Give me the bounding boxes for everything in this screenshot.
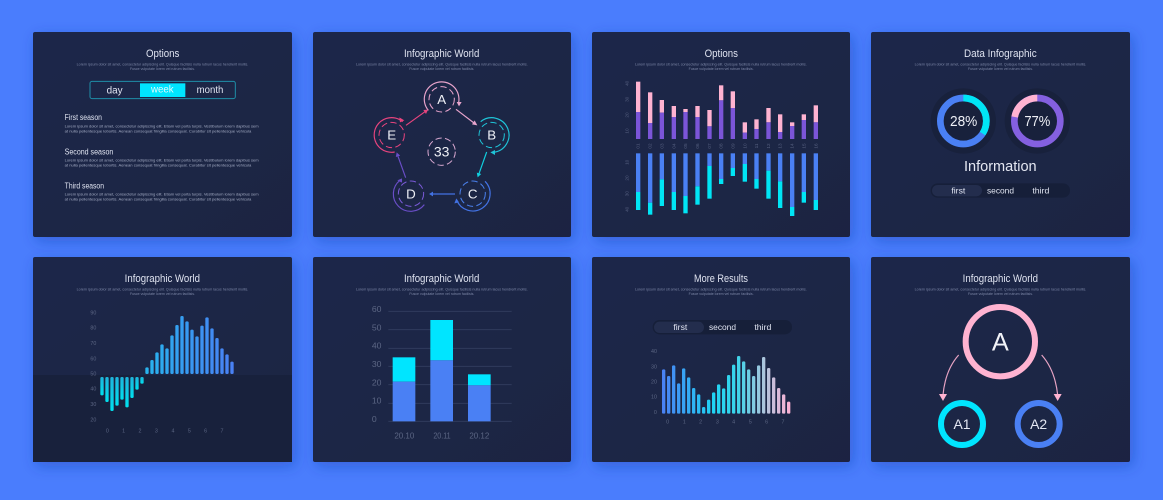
arrow: A to A2	[1042, 355, 1062, 401]
circle A1: A1	[953, 416, 971, 432]
subtitle text	[77, 286, 248, 296]
toggle: day week month	[90, 81, 235, 99]
axis labels: 05	[683, 143, 688, 149]
node E	[374, 117, 404, 152]
tabs: first second third: third	[754, 322, 772, 332]
x axis labels: 0	[106, 429, 109, 435]
arrow: C to D	[429, 192, 455, 196]
text block: third season: Third season	[65, 181, 104, 190]
panel: diverging bar chart	[33, 257, 292, 462]
y axis labels: 30	[90, 402, 96, 408]
text block: second season	[65, 147, 259, 168]
panel: cycle diagram	[313, 32, 571, 237]
heading: infographic world: Infographic World	[963, 273, 1038, 285]
y axis labels: 20	[372, 377, 382, 387]
axis labels: 12	[766, 143, 771, 149]
arrow: E to A	[406, 110, 428, 125]
axis labels: 03	[659, 143, 664, 149]
circle A2	[1018, 403, 1060, 445]
y axis labels: 0	[372, 414, 377, 424]
x axis labels: 6	[204, 429, 207, 435]
x axis labels	[106, 429, 224, 435]
x axis labels: 3	[155, 429, 158, 435]
text block: second season: Second season	[65, 147, 113, 156]
axis labels: 08	[719, 143, 724, 149]
node B	[479, 118, 509, 155]
heading: more results: More Results	[694, 273, 748, 285]
toggle: day week month: day	[107, 85, 123, 96]
x axis labels: 1	[683, 420, 686, 426]
axis labels: 20	[625, 175, 630, 181]
node D	[393, 178, 424, 211]
axis labels: 13	[778, 143, 783, 149]
y axis labels: 40	[651, 349, 657, 355]
subtitle text	[915, 61, 1086, 71]
node B: B	[487, 128, 496, 143]
axis labels: 11	[754, 143, 759, 148]
negative bars	[100, 377, 144, 411]
axis labels: 10	[742, 143, 747, 149]
axis labels: 40	[625, 206, 630, 212]
arrow: B to C	[477, 152, 487, 177]
axis labels: 10	[625, 128, 630, 134]
upper bars: pink segments	[636, 82, 818, 133]
tabs: first second third: third	[1032, 185, 1050, 195]
x axis labels: 2	[699, 420, 702, 426]
column 20.11	[430, 320, 453, 421]
x axis labels: 7	[221, 429, 224, 435]
y axis labels: 40	[90, 387, 96, 393]
text block: second season: at nulla pellentesque lobortis. Aenean consequat fringilla consequat. Curabitur sit pellentesque vehicula	[65, 163, 252, 168]
y axis labels	[90, 310, 96, 423]
subtitle text: Fusce vulputate lorem vel rutrum facilisis.	[409, 66, 474, 71]
subtitle text	[915, 286, 1086, 296]
subtitle text	[356, 286, 528, 296]
y axis labels: 90	[90, 310, 96, 316]
axis labels: 07	[707, 143, 712, 149]
subtitle text	[77, 61, 248, 71]
panel content: donuts	[915, 48, 1086, 198]
subtitle text: Fusce vulputate lorem vel rutrum facilisis.	[130, 291, 195, 296]
subtitle text: Fusce vulputate lorem vel rutrum facilisis.	[968, 66, 1033, 71]
x axis labels: 0	[666, 420, 669, 426]
panel content: more results	[635, 273, 807, 426]
y axis labels: 0	[654, 410, 657, 416]
darker lower band	[33, 375, 292, 462]
y axis labels: 80	[90, 326, 96, 332]
node C: C	[468, 186, 478, 201]
subtitle text: Lorem ipsum dolor sit amet, consectetur adipiscing elit. Quisque facilisis nulla rutrum lacus hendrerit mollis.	[915, 286, 1086, 291]
heading: infographic world: Infographic World	[404, 273, 479, 285]
x axis labels: 4	[732, 420, 735, 426]
donut: 77 percent	[1005, 88, 1070, 154]
axis labels: 30	[625, 96, 630, 102]
subtitle text	[635, 61, 807, 71]
y axis labels: 30	[651, 364, 657, 370]
subtitle text: Lorem ipsum dolor sit amet, consectetur adipiscing elit. Quisque facilisis nulla rutrum lacus hendrerit mollis.	[356, 286, 528, 291]
center value 33: 33	[434, 144, 450, 160]
y axis labels	[651, 349, 657, 416]
text block: first season: Lorem ipsum dolor sit amet, consectetur adipiscing elit. Etiam vel porta turpis. Vestibulum lorem dapibus sem	[65, 123, 259, 128]
text block: third season	[65, 181, 259, 202]
x axis labels	[666, 420, 785, 426]
subtitle text: Fusce vulputate lorem vel rutrum facilisis.	[130, 66, 195, 71]
panel: options season list	[33, 32, 292, 237]
circle A	[966, 307, 1035, 376]
x axis labels: 1	[122, 429, 125, 435]
subtitle text: Lorem ipsum dolor sit amet, consectetur adipiscing elit. Quisque facilisis nulla rutrum lacus hendrerit mollis.	[915, 61, 1086, 66]
axis labels: 02	[648, 143, 653, 149]
heading: infographic world: Infographic World	[404, 48, 479, 60]
panel content: hierarchy	[915, 273, 1086, 445]
panel: donut charts	[871, 32, 1130, 237]
circle A1	[941, 403, 983, 445]
text block: first season	[65, 113, 259, 133]
node D: D	[406, 186, 416, 201]
text block: third season: at nulla pellentesque lobortis. Aenean consequat fringilla consequat. Curabitur sit pellentesque vehicula	[65, 197, 252, 202]
heading: options: Options	[705, 48, 738, 60]
axis labels: 20	[625, 112, 630, 118]
tabs: first second third: first	[951, 185, 966, 195]
y axis labels: 10	[372, 396, 382, 406]
donut: 28 percent: 28%	[950, 114, 977, 130]
gradient bars	[662, 356, 790, 414]
axis labels	[625, 80, 818, 212]
subtitle text: Fusce vulputate lorem vel rutrum facilisis.	[968, 291, 1033, 296]
axis labels: 10	[625, 159, 630, 165]
tabs: first second third	[653, 320, 792, 334]
node A: A	[437, 92, 446, 107]
panel: mirrored stacked bars	[592, 32, 850, 237]
arrow: A to B	[456, 109, 477, 125]
column 20.12	[468, 374, 491, 421]
text block: first season: at nulla pellentesque lobortis. Aenean consequat fringilla consequat. Curabitur sit pellentesque vehicula	[65, 128, 252, 133]
lower bars: cyan segments	[636, 164, 818, 216]
panel content: diverging bars	[77, 273, 248, 435]
x axis labels: 5	[749, 420, 752, 426]
x axis labels: 20.10	[394, 430, 414, 440]
heading: options: Options	[146, 48, 179, 60]
y axis labels: 60	[372, 304, 382, 314]
tabs: first second third	[931, 183, 1070, 198]
node C	[454, 181, 490, 211]
axis labels: 06	[695, 143, 700, 149]
panel: more results	[592, 257, 850, 462]
toggle: day week month: week	[150, 85, 174, 96]
x axis labels	[394, 430, 489, 440]
subtitle text: Lorem ipsum dolor sit amet, consectetur adipiscing elit. Quisque facilisis nulla rutrum lacus hendrerit mollis.	[77, 286, 248, 291]
subtitle text: Lorem ipsum dolor sit amet, consectetur adipiscing elit. Quisque facilisis nulla rutrum lacus hendrerit mollis.	[635, 286, 807, 291]
axis labels: 40	[625, 80, 630, 86]
tabs: first second third: second	[709, 322, 736, 332]
subtitle text: Fusce vulputate lorem vel rutrum facilisis.	[689, 291, 754, 296]
y axis labels: 20	[90, 417, 96, 423]
toggle: day week month: month	[197, 85, 223, 96]
subtitle text: Lorem ipsum dolor sit amet, consectetur adipiscing elit. Quisque facilisis nulla rutrum lacus hendrerit mollis.	[356, 61, 528, 66]
panel: hierarchy circles	[871, 257, 1130, 462]
panel content: stacked columns	[356, 273, 528, 440]
axis labels: 30	[625, 191, 630, 196]
node E: E	[387, 128, 396, 143]
x axis labels: 4	[172, 429, 175, 435]
y axis labels: 50	[90, 371, 96, 377]
axis labels: 04	[671, 143, 676, 149]
y axis labels	[372, 304, 382, 424]
y axis labels: 20	[651, 380, 657, 386]
y axis labels: 60	[90, 356, 96, 362]
x axis labels: 6	[765, 420, 768, 426]
subtitle text: Fusce vulputate lorem vel rutrum facilisis.	[409, 291, 474, 296]
donut: 28 percent	[931, 88, 996, 154]
heading: information: Information	[964, 159, 1037, 175]
arrow: A to A1	[939, 355, 959, 401]
x axis labels: 7	[782, 420, 785, 426]
donut: 77 percent: 77%	[1024, 114, 1050, 130]
tabs: first second third: first	[673, 322, 688, 332]
subtitle text: Lorem ipsum dolor sit amet, consectetur adipiscing elit. Quisque facilisis nulla rutrum lacus hendrerit mollis.	[635, 61, 807, 66]
axis labels: 14	[790, 143, 795, 149]
subtitle text: Lorem ipsum dolor sit amet, consectetur adipiscing elit. Quisque facilisis nulla rutrum lacus hendrerit mollis.	[77, 61, 248, 66]
panel: stacked column chart	[313, 257, 571, 462]
positive bars	[145, 316, 234, 374]
circle A2: A2	[1030, 416, 1047, 432]
text block: first season: First season	[65, 113, 102, 122]
y axis labels: 30	[372, 359, 382, 369]
axis labels: 01	[636, 143, 641, 149]
heading: data infographic: Data Infographic	[964, 48, 1037, 60]
lower bars: blue segments	[636, 153, 818, 207]
panel content: cycle	[356, 48, 528, 211]
x axis labels: 20.12	[469, 430, 489, 440]
upper bars: purple segments	[636, 100, 818, 139]
text block: third season: Lorem ipsum dolor sit amet, consectetur adipiscing elit. Etiam vel porta turpis. Vestibulum lorem dapibus sem	[65, 192, 259, 197]
axis labels: 09	[730, 143, 735, 149]
y axis labels: 10	[651, 395, 657, 401]
column 20.10	[393, 357, 415, 421]
tabs: first second third: second	[987, 185, 1014, 195]
text block: second season: Lorem ipsum dolor sit amet, consectetur adipiscing elit. Etiam vel porta turpis. Vestibulum lorem dapibus sem	[65, 158, 259, 163]
center value 33	[428, 138, 455, 165]
subtitle text	[356, 61, 528, 71]
y axis labels: 70	[90, 341, 96, 347]
panel content: options	[65, 48, 259, 202]
heading: infographic world: Infographic World	[125, 273, 200, 285]
x axis labels: 3	[716, 420, 719, 426]
axis labels: 16	[813, 143, 818, 149]
x axis labels: 20.11	[433, 430, 451, 440]
subtitle text	[635, 286, 807, 296]
arrow: D to E	[396, 152, 406, 178]
y axis labels: 40	[372, 341, 382, 351]
axis labels: 15	[801, 143, 806, 149]
y axis labels: 50	[372, 322, 382, 332]
subtitle text: Fusce vulputate lorem vel rutrum facilisis.	[689, 66, 754, 71]
node A	[424, 82, 462, 112]
x axis labels: 5	[188, 429, 191, 435]
circle A: A	[992, 329, 1009, 357]
x axis labels: 2	[139, 429, 142, 435]
panel content: mirrored bars	[625, 48, 818, 216]
